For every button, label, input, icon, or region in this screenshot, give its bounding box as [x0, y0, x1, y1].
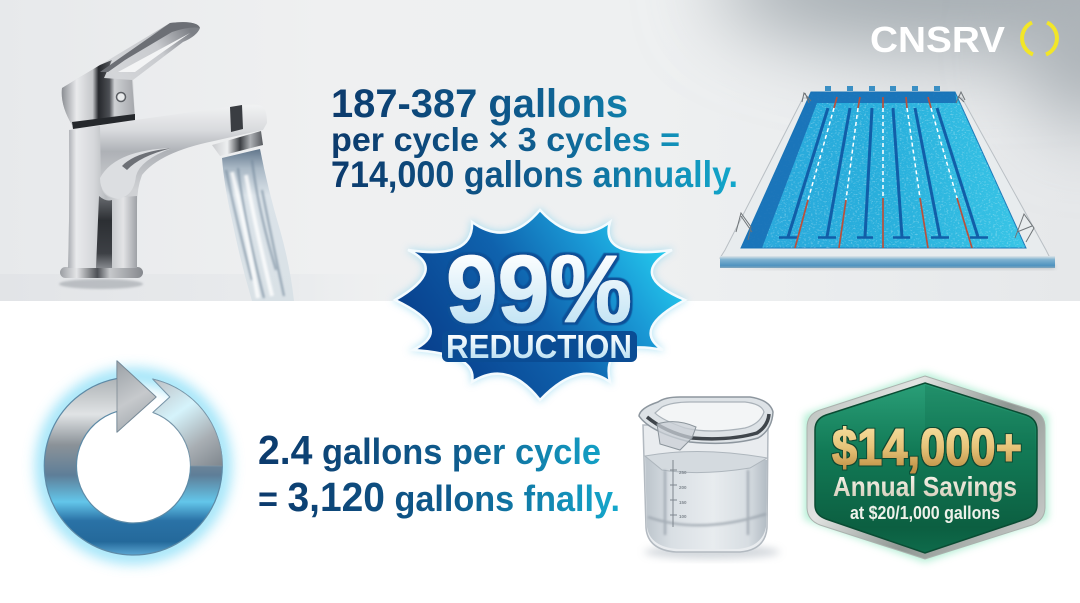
logo ring — [1022, 22, 1057, 54]
savings panel right facet — [925, 385, 1035, 450]
ring glow — [44, 376, 224, 556]
badge starburst — [395, 210, 685, 400]
container scale marks: 150 — [679, 500, 687, 505]
container scale marks: 250 — [679, 470, 687, 475]
icon: recycling ring arrow — [44, 361, 224, 556]
pool water — [741, 92, 1026, 248]
ring highlight — [153, 379, 222, 466]
pool front wall — [720, 256, 1055, 268]
badge label backing — [442, 331, 637, 362]
container lid — [639, 397, 773, 443]
badge: 99% reduction — [395, 210, 685, 400]
water stream — [222, 149, 294, 301]
line: 714,000 gallons annually.: 714,000 gallons annually. — [331, 154, 738, 195]
container water surface — [645, 451, 767, 473]
container shadow — [644, 545, 780, 559]
container body — [643, 425, 768, 552]
pool shadow — [724, 258, 1056, 268]
badge glow — [395, 210, 685, 400]
logo: CNSRV — [870, 19, 1057, 60]
savings badge frame — [807, 376, 1045, 559]
faucet body and spout — [68, 105, 267, 268]
pool ladders — [736, 92, 1034, 242]
background: upper grey band — [0, 0, 1080, 301]
ring arrow — [44, 361, 222, 555]
line: per cycle × 3 cycles =: per cycle × 3 cycles = — [331, 121, 680, 158]
container scale marks: 200 — [679, 485, 687, 490]
icon: swimming pool — [720, 86, 1056, 268]
logo wordmark: CNSRV — [870, 19, 1005, 60]
container water — [645, 451, 767, 549]
faucet lever handle — [62, 22, 200, 129]
savings amount: $14,000+ — [832, 419, 1022, 477]
savings label: Annual Savings — [833, 471, 1017, 502]
starting blocks — [825, 86, 940, 91]
savings rate: at $20/1,000 gallons — [850, 503, 1000, 523]
pool water sparkle — [741, 92, 1026, 248]
icon: water container — [639, 397, 780, 559]
line: 2.4 gallons per cycle: 2.4 gallons per cycle — [258, 427, 601, 473]
container inner corners — [648, 470, 766, 535]
container scale marks: 100 — [679, 514, 687, 519]
badge number: 99% — [446, 236, 632, 343]
container clip — [657, 422, 696, 450]
text: water use after — [258, 427, 620, 520]
pool deck — [720, 98, 1050, 258]
line: 187-387 gallons: 187-387 gallons — [331, 82, 628, 126]
badge: annual savings — [807, 376, 1045, 559]
faucet base — [59, 267, 143, 289]
savings badge panel — [815, 383, 1037, 553]
arrowhead — [117, 361, 156, 432]
badge label: REDUCTION — [446, 328, 632, 365]
icon: chrome faucet with running water — [59, 22, 294, 301]
pool shaded left wall and far wall — [741, 92, 957, 248]
lane ropes — [779, 97, 988, 248]
savings badge glow — [807, 376, 1045, 559]
line: = 3,120 gallons fnally.: = 3,120 gallons fnally. — [258, 474, 620, 520]
text: water use before — [331, 82, 738, 195]
container scale marks — [670, 460, 687, 527]
